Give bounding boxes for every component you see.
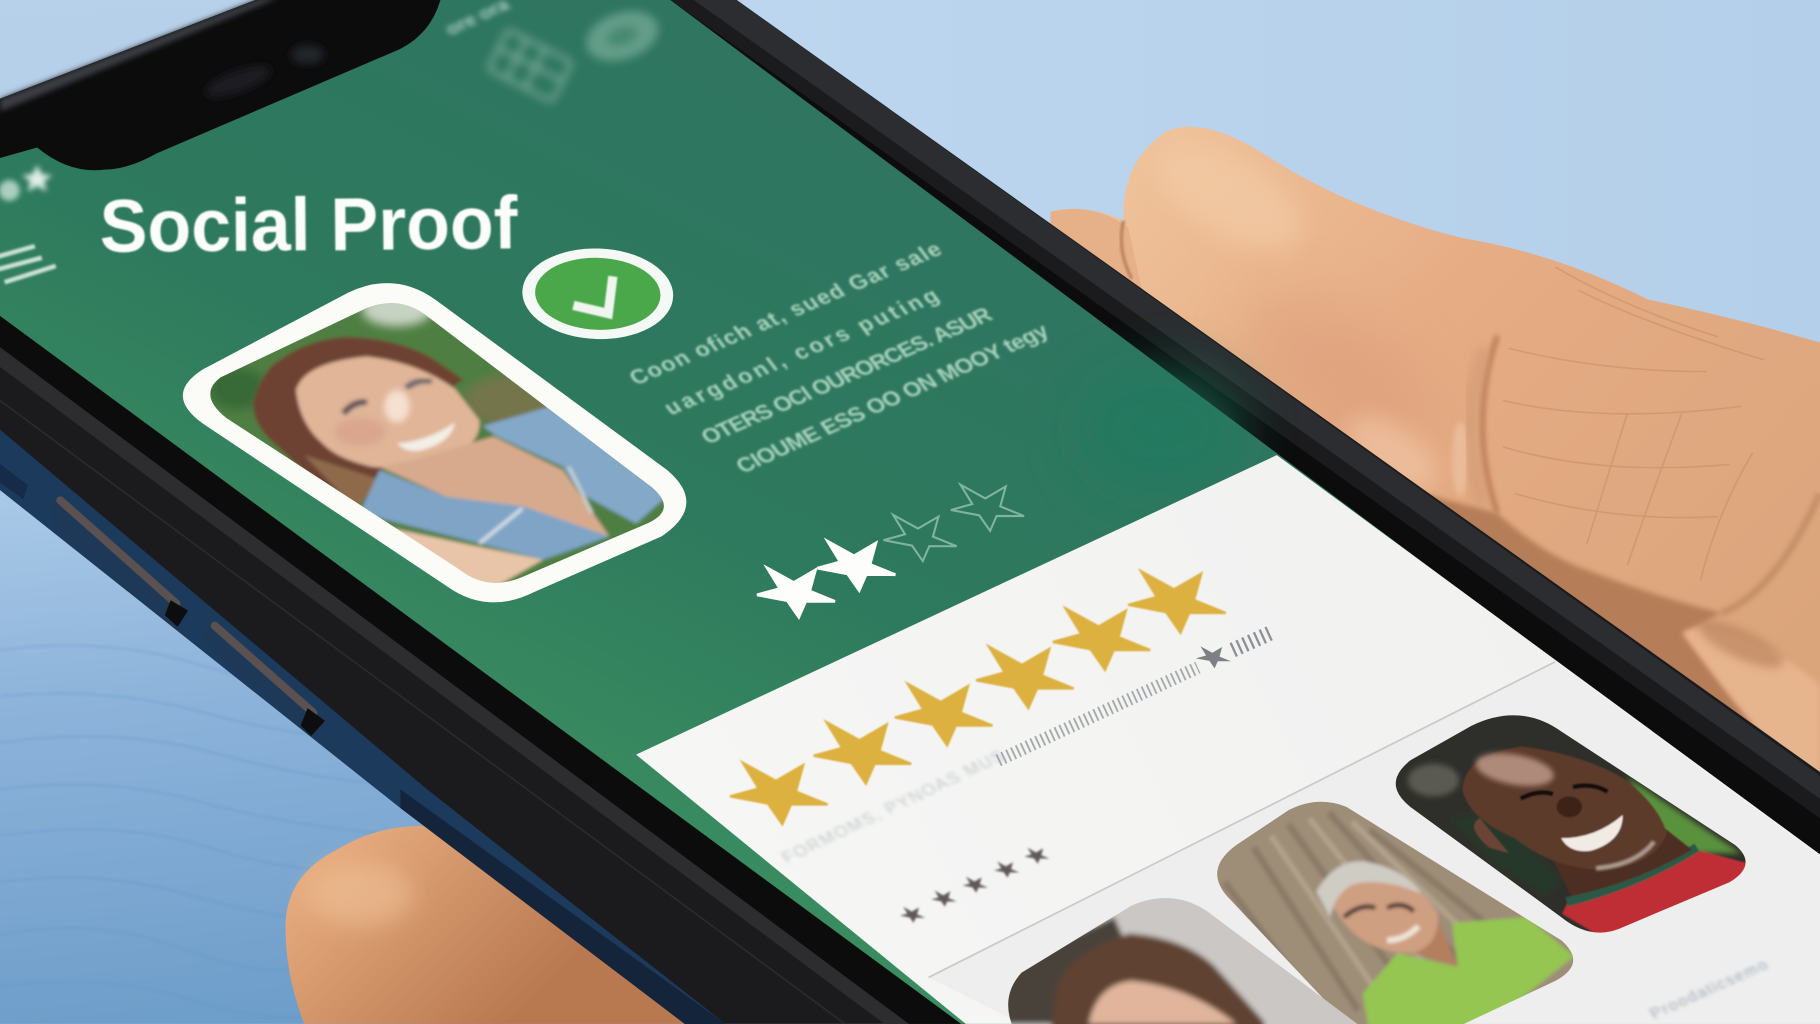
arm (391, 524, 544, 583)
denim jacket left (360, 470, 609, 560)
notch camera (202, 45, 324, 103)
icon: badge (top) (580, 3, 665, 70)
small caption bottom right: Proodaticsemo (1647, 957, 1771, 1023)
icon: app square (top) (488, 30, 572, 102)
text block: testimonial copy: uargdonl, cors puting (659, 284, 944, 420)
skin creases (1503, 267, 1764, 580)
title: Social Proof (99, 180, 519, 268)
shirt (1562, 850, 1746, 933)
text block: testimonial copy: CIOUME ESS OO ON MOOY tegy (731, 319, 1054, 478)
head (1462, 746, 1667, 870)
icon: hamburger menu (0, 246, 56, 282)
reviewer photo: smiling bald man (1396, 715, 1746, 933)
shadow below upper finger (1428, 492, 1753, 724)
face (296, 356, 479, 468)
side buttons (0, 462, 325, 736)
neck (1550, 824, 1692, 896)
icon: green check badge (521, 246, 675, 342)
white stars rating (757, 541, 895, 617)
text block: testimonial copy (624, 237, 1054, 478)
head (1332, 880, 1440, 955)
reviewer photo: older man in green shirt (1217, 802, 1574, 1024)
knuckle fold (1482, 336, 1497, 513)
finger under the phone (286, 826, 696, 1024)
gold star rating row (730, 571, 1226, 824)
eyes and smile (344, 402, 367, 413)
text block: testimonial copy: Coon ofich at, sued Gar sale (624, 237, 947, 389)
text block: testimonial copy: OTERS OCl OURORCES. ASUR (696, 303, 997, 449)
status bar icons (0, 165, 52, 201)
neck and chest (380, 437, 609, 536)
curled lower finger (1683, 629, 1820, 780)
phone side: navy frame (0, 430, 725, 1024)
panel: white review card (636, 455, 1820, 1024)
outline stars rating (884, 485, 1024, 561)
denim jacket right (483, 406, 666, 524)
hand: fingers behind phone (1050, 126, 1820, 772)
small dark stars (900, 848, 1049, 923)
rating caption and hatch bar: FORMOMS, PYNOAS MUS (777, 746, 1009, 867)
rating caption and hatch bar (777, 633, 1271, 867)
hair (253, 337, 463, 510)
panel: testimonial photo of woman (183, 279, 696, 604)
shirt (1363, 917, 1574, 1024)
reviewer photo: woman with brown hair (1008, 898, 1358, 1024)
